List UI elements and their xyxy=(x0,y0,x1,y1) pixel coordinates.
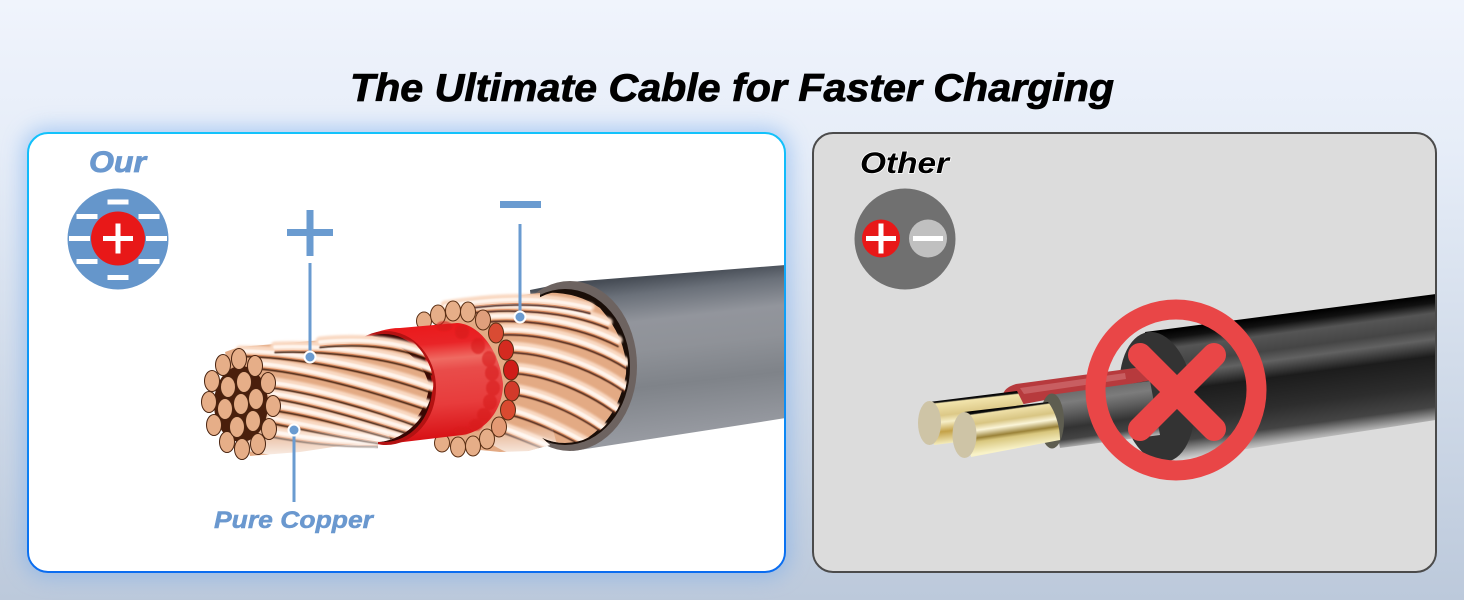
grey wire collar xyxy=(1043,394,1064,448)
grey wire xyxy=(1050,381,1160,448)
red wire highlight xyxy=(1020,373,1126,394)
label: Other: Other xyxy=(860,147,952,180)
grey outer jacket xyxy=(530,265,786,451)
callout: positive xyxy=(287,210,333,362)
front conductor tip xyxy=(952,412,976,458)
panel: our cable xyxy=(28,133,786,572)
panel glow xyxy=(24,129,789,576)
other cable illustration xyxy=(918,294,1436,467)
callout: pure copper xyxy=(214,424,375,534)
negative strand ends xyxy=(416,301,520,457)
sleeve interior xyxy=(372,334,432,442)
icon: our conductor layout xyxy=(68,188,168,290)
panel: other cable xyxy=(813,133,1436,572)
positive conductor strands xyxy=(225,336,436,457)
callout: negative xyxy=(500,201,541,322)
our cable illustration xyxy=(202,265,786,460)
label: Our: Our xyxy=(89,146,148,179)
negative conductor strands xyxy=(440,293,628,458)
red wire xyxy=(1003,366,1152,404)
positive strand ends xyxy=(202,348,280,460)
back conductor tip xyxy=(918,401,941,445)
sleeve opening rim xyxy=(365,331,436,445)
title: The Ultimate Cable for Faster Charging xyxy=(350,67,1114,110)
icon: prohibited mark xyxy=(1096,310,1256,470)
red insulation sleeve xyxy=(370,323,503,443)
sleeve ghost strands xyxy=(436,321,500,435)
positive strand core shadow xyxy=(214,366,268,442)
front gold conductor xyxy=(964,402,1060,457)
jacket end cap xyxy=(1120,332,1192,460)
callout: pure copper: Pure Copper xyxy=(214,507,375,534)
jacket end ring xyxy=(536,281,637,451)
jacket interior xyxy=(540,289,630,445)
black outer jacket xyxy=(1145,294,1436,462)
icon: other conductor layout xyxy=(854,188,956,290)
back gold conductor xyxy=(929,391,1030,445)
